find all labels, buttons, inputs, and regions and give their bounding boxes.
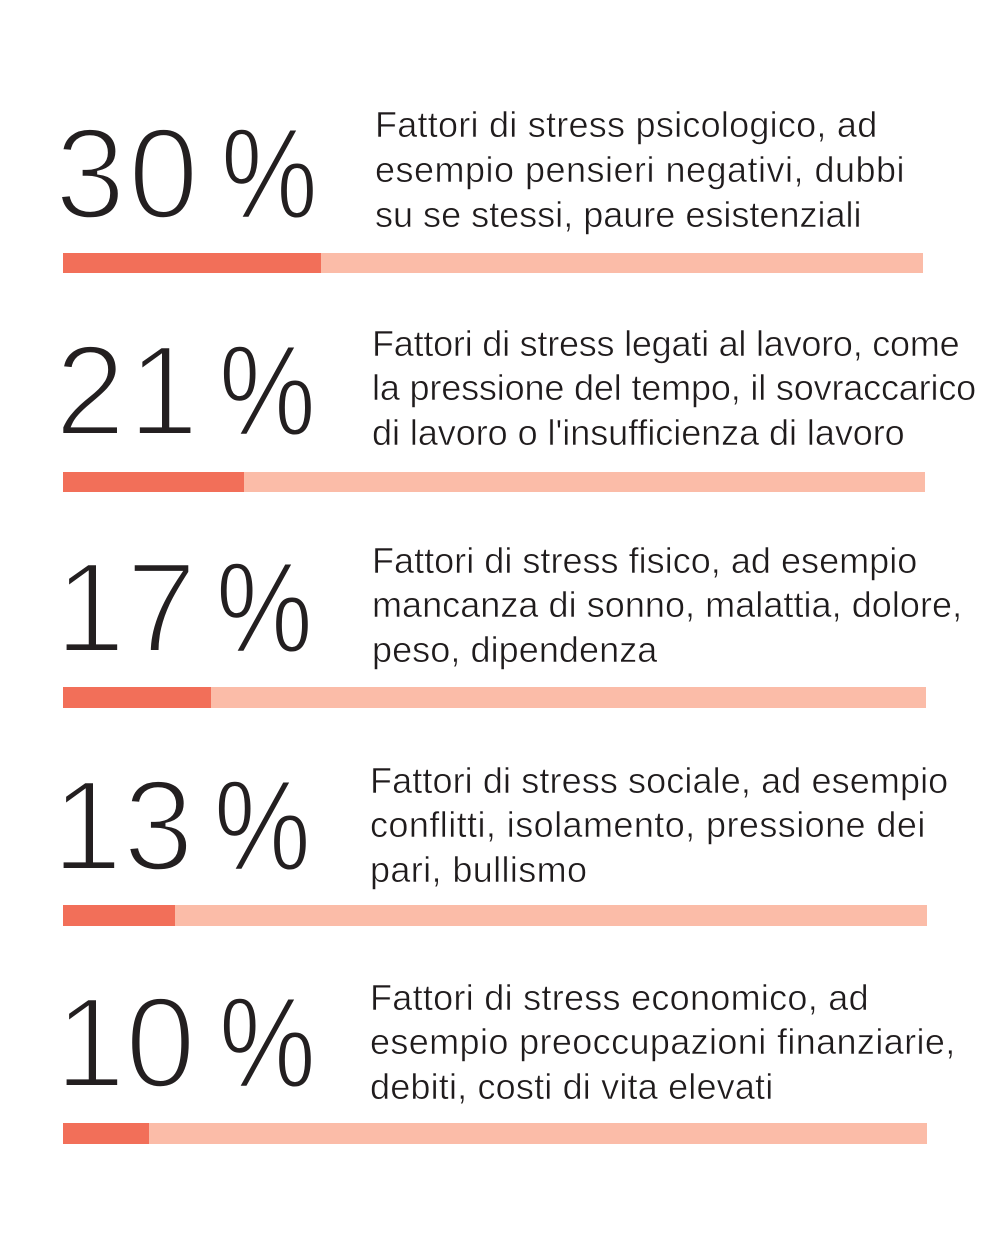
bar: 21%	[62, 472, 924, 492]
stat: 10%	[55, 971, 316, 1115]
bar: 17%	[62, 687, 926, 708]
stat: 10%: %	[219, 971, 316, 1115]
stat: 17%: %	[216, 536, 313, 680]
text: physical stress description: mancanza di sonno, malattia, dolore,	[372, 584, 962, 625]
stat: 21%	[55, 319, 316, 463]
stat: 10%: 10	[55, 971, 196, 1115]
text: work stress description: Fattori di stress legati al lavoro, come	[372, 323, 959, 364]
stat: 21%: %	[219, 319, 316, 463]
stat: 13%: 13	[52, 754, 195, 898]
text: physical stress description	[372, 540, 962, 670]
stat: 13%: %	[214, 754, 311, 898]
text: physical stress description: Fattori di stress fisico, ad esempio	[372, 540, 917, 581]
stat: 30%	[55, 102, 318, 246]
text: work stress description	[372, 323, 976, 453]
stat: 13%	[52, 754, 311, 898]
stat: 30%: %	[221, 102, 318, 246]
text: psychological stress description: su se stessi, paure esistenziali	[375, 194, 862, 235]
stat: 17%: 17	[55, 536, 198, 680]
text: psychological stress description	[375, 104, 905, 235]
text: psychological stress description: Fattori di stress psicologico, ad	[375, 104, 877, 145]
bar: 13%	[62, 905, 926, 926]
stat: 17%	[55, 536, 313, 680]
bar: 30%	[62, 253, 923, 273]
text: social stress description: Fattori di stress sociale, ad esempio	[370, 760, 948, 801]
text: social stress description: conflitti, isolamento, pressione dei	[370, 804, 926, 845]
text: work stress description: la pressione del tempo, il sovraccarico	[372, 367, 976, 408]
stat: 21%: 21	[55, 319, 202, 463]
text: work stress description: di lavoro o l'insufficienza di lavoro	[372, 412, 905, 453]
text: social stress description	[370, 760, 948, 890]
text: economic stress description: debiti, costi di vita elevati	[370, 1066, 773, 1107]
stat: 30%: 30	[55, 102, 202, 246]
text: physical stress description: peso, dipendenza	[372, 629, 657, 670]
text: economic stress description: Fattori di stress economico, ad	[370, 977, 869, 1018]
text: economic stress description: esempio preoccupazioni finanziarie,	[370, 1021, 956, 1062]
bar: 10%	[62, 1123, 926, 1144]
text: psychological stress description: esempio pensieri negativi, dubbi	[375, 149, 905, 190]
text: social stress description: pari, bullismo	[370, 849, 587, 890]
text: economic stress description	[370, 977, 956, 1107]
